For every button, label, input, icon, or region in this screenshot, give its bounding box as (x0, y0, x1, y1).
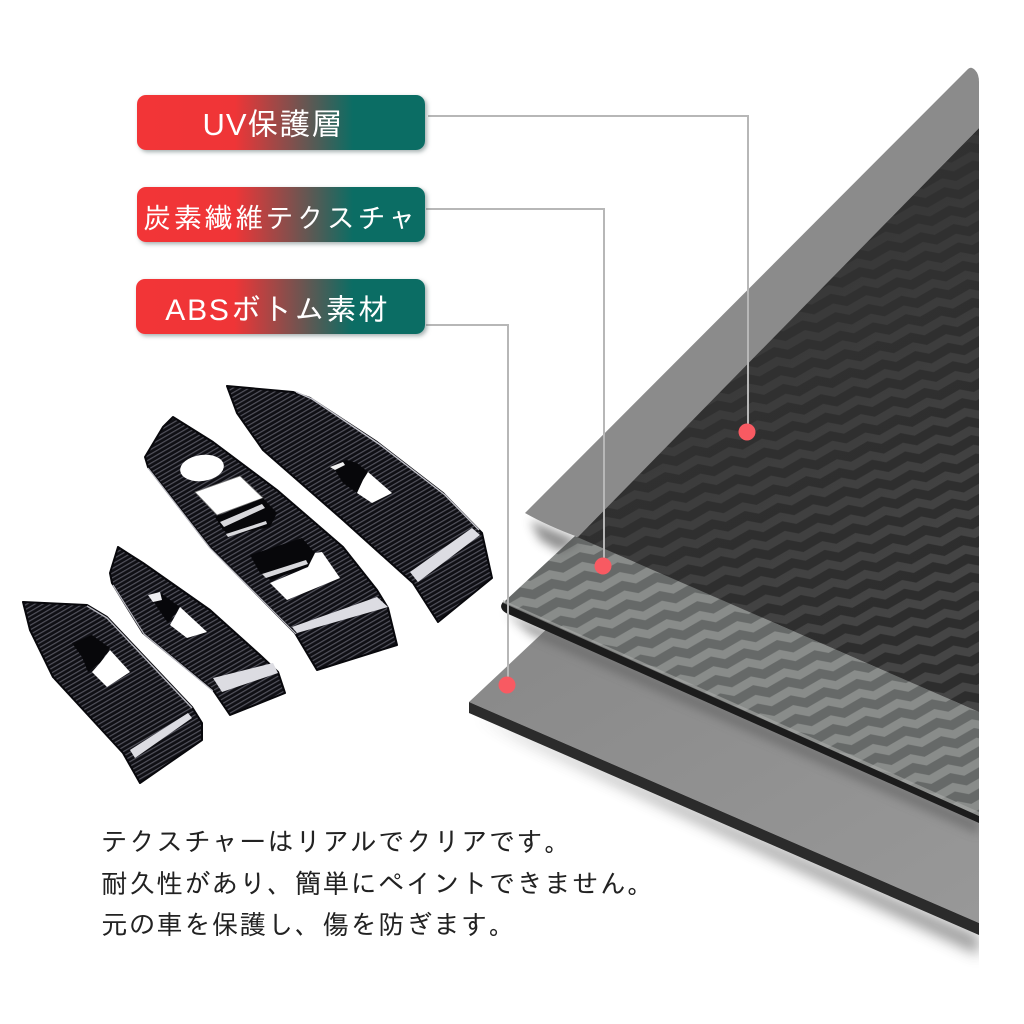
marker: carbon (594, 558, 612, 574)
UV layer shadow (530, 520, 580, 552)
marker: UV (738, 424, 756, 440)
trim piece: main switch panel (145, 417, 397, 670)
marker: ABS (498, 676, 516, 694)
carbon fibre layer (501, 128, 979, 823)
leader line: ABS (426, 325, 508, 680)
trim piece: front left (23, 602, 202, 783)
label: ABS bottom material: ABSボトム素材 (165, 294, 390, 327)
description text: 耐久性があり、簡単にペイントできません。 (101, 870, 655, 896)
description text: テクスチャーはリアルでクリアです。 (101, 829, 572, 855)
trim piece: rear right (227, 386, 492, 622)
label: carbon fibre texture: 炭素繊維テクスチャ (143, 203, 419, 234)
material layers (469, 68, 979, 955)
trim piece: small rear left (110, 547, 285, 715)
leader line: carbon (426, 209, 604, 560)
bottom layer shadow (478, 716, 979, 955)
description text (101, 829, 655, 938)
label: UV protective layer: UV保護層 (202, 107, 344, 142)
leader line: UV (428, 116, 748, 426)
label: ABS bottom material (136, 279, 425, 334)
UV protective layer (525, 68, 979, 537)
description text: 元の車を保護し、傷を防ぎます。 (101, 912, 516, 938)
label: carbon fibre texture (137, 187, 425, 242)
ABS bottom layer (469, 625, 979, 935)
label: UV protective layer (137, 95, 425, 150)
middle layer shadow (506, 612, 979, 834)
